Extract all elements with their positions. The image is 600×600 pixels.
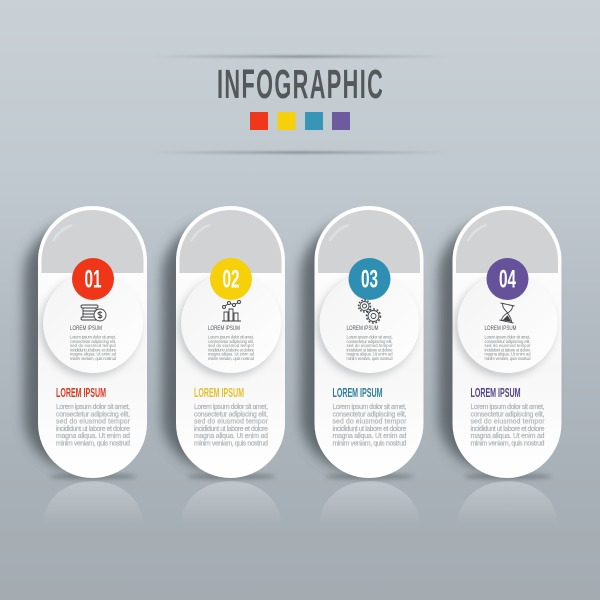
gray top	[318, 210, 420, 273]
reflection	[43, 481, 143, 524]
body text: sed do eiusmod tempor	[332, 419, 407, 426]
mini text: magna aliqua. Ut enim ad	[346, 352, 393, 357]
body text: incididunt ut labore et dolore	[470, 426, 545, 433]
body text: consectetur adipiscing elit,	[470, 411, 545, 418]
card body	[176, 206, 285, 478]
body text: magna aliqua. Ut enim ad	[470, 433, 545, 440]
contact shadow	[326, 474, 414, 479]
mini text: sed do eiusmod tempor	[70, 343, 117, 348]
number badge	[486, 258, 528, 300]
body text	[194, 404, 269, 448]
icon: bar chart	[222, 300, 241, 321]
body text: magna aliqua. Ut enim ad	[332, 433, 407, 440]
contact shadow	[49, 474, 137, 479]
card shadow	[438, 222, 550, 470]
mini text: minim veniam, quis nostrud	[484, 356, 531, 361]
number badge	[210, 258, 252, 300]
card 4	[438, 206, 562, 524]
heading: LOREM IPSUM	[194, 386, 244, 400]
icon: hourglass	[500, 303, 514, 323]
card 3	[300, 206, 424, 524]
gloss highlight	[53, 225, 72, 241]
card 2	[162, 206, 285, 524]
mini heading: LOREM IPSUM	[484, 325, 516, 332]
gray top	[42, 210, 144, 273]
number badge: 03	[361, 266, 378, 294]
body text: sed do eiusmod tempor	[194, 419, 269, 426]
gloss highlight	[468, 225, 486, 241]
body text: sed do eiusmod tempor	[56, 419, 131, 426]
body text: minim veniam, quis nostrud	[194, 440, 268, 448]
mini heading: LOREM IPSUM	[70, 325, 102, 332]
reflection	[320, 481, 420, 524]
mini text: consectetur adipiscing elit,	[346, 339, 392, 344]
gloss highlight	[330, 225, 348, 241]
number badge: 01	[84, 266, 102, 294]
mini text	[346, 334, 393, 361]
body text: Lorem ipsum dolor sit amet,	[470, 404, 545, 411]
mini text	[208, 334, 255, 361]
disc	[458, 273, 558, 373]
heading: LOREM IPSUM	[332, 386, 382, 400]
mini text: magna aliqua. Ut enim ad	[70, 352, 117, 357]
mini text: Lorem ipsum dolor sit amet,	[208, 334, 254, 340]
body text	[470, 404, 545, 448]
mini text: consectetur adipiscing elit,	[208, 339, 254, 344]
mini text	[484, 334, 531, 361]
disc	[181, 273, 281, 373]
heading: LOREM IPSUM	[56, 386, 106, 400]
card shadow	[300, 222, 412, 470]
disc shadow	[40, 277, 140, 377]
disc shadow	[316, 277, 416, 377]
body text: consectetur adipiscing elit,	[56, 411, 130, 418]
mini text: consectetur adipiscing elit,	[484, 339, 530, 344]
mini text: Lorem ipsum dolor sit amet,	[70, 334, 116, 340]
mini text: minim veniam, quis nostrud	[208, 356, 255, 361]
body text: magna aliqua. Ut enim ad	[56, 433, 130, 440]
title: INFOGRAPHIC	[217, 61, 384, 107]
mini text: sed do eiusmod tempor	[346, 343, 393, 348]
body text: Lorem ipsum dolor sit amet,	[56, 404, 130, 411]
mini text: sed do eiusmod tempor	[484, 343, 531, 348]
disc	[43, 273, 143, 373]
mini heading: LOREM IPSUM	[208, 325, 240, 332]
disc	[320, 273, 420, 373]
mini text: minim veniam, quis nostrud	[70, 356, 117, 361]
reflection	[181, 481, 281, 524]
disc shadow	[454, 277, 554, 377]
body text: Lorem ipsum dolor sit amet,	[332, 404, 407, 411]
mini text: Lorem ipsum dolor sit amet,	[484, 334, 530, 340]
body text	[56, 404, 131, 448]
gray top	[456, 210, 558, 273]
number badge: 02	[222, 266, 240, 294]
mini heading: LOREM IPSUM	[346, 325, 378, 332]
card body	[452, 206, 562, 478]
card 1	[24, 206, 147, 524]
mini text: sed do eiusmod tempor	[208, 343, 255, 348]
mini text: magna aliqua. Ut enim ad	[484, 352, 531, 357]
bottom divider	[150, 152, 450, 154]
mini text: incididunt ut labore et dolore	[484, 347, 531, 352]
card body	[314, 206, 424, 478]
body text: minim veniam, quis nostrud	[470, 440, 545, 448]
body text: incididunt ut labore et dolore	[332, 426, 407, 433]
disc shadow	[178, 277, 278, 377]
card shadow	[162, 222, 274, 470]
top divider	[150, 56, 450, 58]
icon: coins	[81, 305, 106, 321]
body text: Lorem ipsum dolor sit amet,	[194, 404, 268, 411]
gray top	[180, 210, 282, 273]
reflection	[458, 481, 558, 524]
color squares	[250, 112, 350, 130]
gloss highlight	[191, 225, 210, 241]
mini text: Lorem ipsum dolor sit amet,	[346, 334, 392, 340]
number badge: 04	[499, 266, 516, 294]
body text: sed do eiusmod tempor	[470, 419, 545, 426]
contact shadow	[464, 474, 552, 479]
body text: minim veniam, quis nostrud	[332, 440, 407, 448]
body text: minim veniam, quis nostrud	[56, 440, 130, 448]
body text: consectetur adipiscing elit,	[194, 411, 268, 418]
number badge	[348, 258, 390, 300]
body text: incididunt ut labore et dolore	[56, 426, 130, 433]
mini text: consectetur adipiscing elit,	[70, 339, 116, 344]
mini text: incididunt ut labore et dolore	[208, 347, 255, 352]
body text: magna aliqua. Ut enim ad	[194, 433, 268, 440]
icon: gears	[358, 300, 380, 323]
number badge	[72, 258, 114, 300]
body text: consectetur adipiscing elit,	[332, 411, 407, 418]
card body	[38, 206, 147, 478]
mini text: incididunt ut labore et dolore	[346, 347, 393, 352]
mini text	[70, 334, 117, 361]
body text: incididunt ut labore et dolore	[194, 426, 268, 433]
heading: LOREM IPSUM	[470, 386, 520, 400]
mini text: minim veniam, quis nostrud	[346, 356, 393, 361]
mini text: incididunt ut labore et dolore	[70, 347, 117, 352]
mini text: magna aliqua. Ut enim ad	[208, 352, 255, 357]
body text	[332, 404, 407, 448]
card shadow	[24, 222, 136, 470]
contact shadow	[187, 474, 275, 479]
